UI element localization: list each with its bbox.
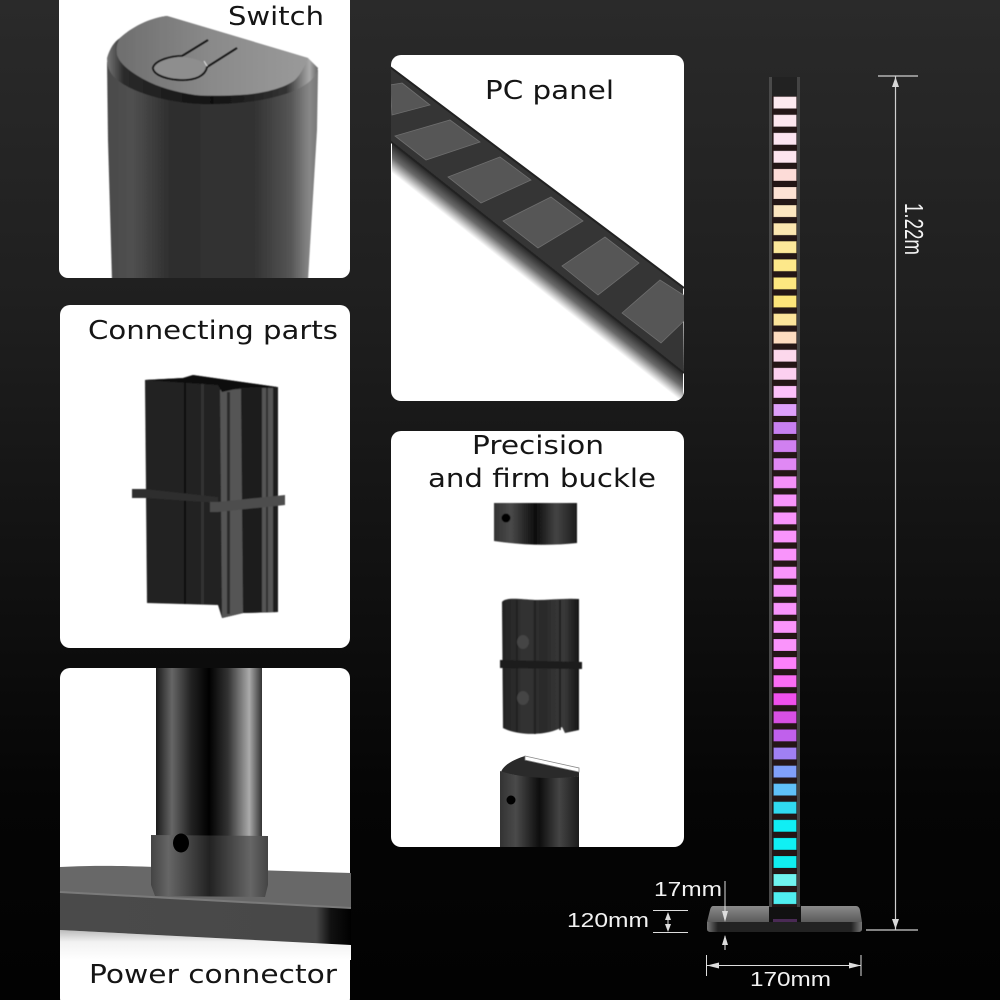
dimension: height 1.22m: 1.22m	[899, 203, 929, 255]
lamp base	[707, 904, 862, 932]
lamp: illuminated strip	[707, 77, 862, 932]
icon: pillar and base	[60, 668, 351, 960]
dimension: width 170mm	[706, 955, 861, 991]
icon: switch button	[153, 40, 237, 80]
heading: pc panel: PC panel	[485, 76, 614, 106]
heading: precision line 1: Precision	[472, 431, 604, 461]
dimension: depth 120mm: 120mm	[567, 909, 649, 932]
dimension: height 1.22m	[866, 76, 929, 930]
strip housing	[769, 77, 800, 907]
heading: switch: Switch	[228, 2, 324, 32]
heading: power connector: Power connector	[89, 960, 337, 990]
icon: diagonal light strip	[390, 66, 685, 410]
panel: pc panel	[390, 55, 685, 410]
dimension: depth 120mm	[567, 909, 688, 932]
icon: switch cylinder	[107, 16, 318, 280]
panel: switch	[59, 0, 350, 280]
panel: connecting parts	[60, 305, 350, 648]
icon: top collar	[494, 503, 577, 545]
dimension: thickness 17mm: 17mm	[654, 878, 722, 901]
LED cells	[774, 97, 796, 904]
icon: connector piece	[132, 375, 285, 618]
dimension: thickness 17mm	[654, 878, 728, 950]
icon: middle connector	[500, 599, 582, 734]
panel: precision and firm buckle	[391, 431, 684, 850]
heading: connecting parts: Connecting parts	[88, 316, 338, 346]
dimension: width 170mm: 170mm	[750, 968, 831, 991]
heading: precision line 2: and firm buckle	[428, 464, 656, 494]
icon: lower tube	[500, 756, 579, 850]
panel: power connector	[60, 668, 351, 1000]
